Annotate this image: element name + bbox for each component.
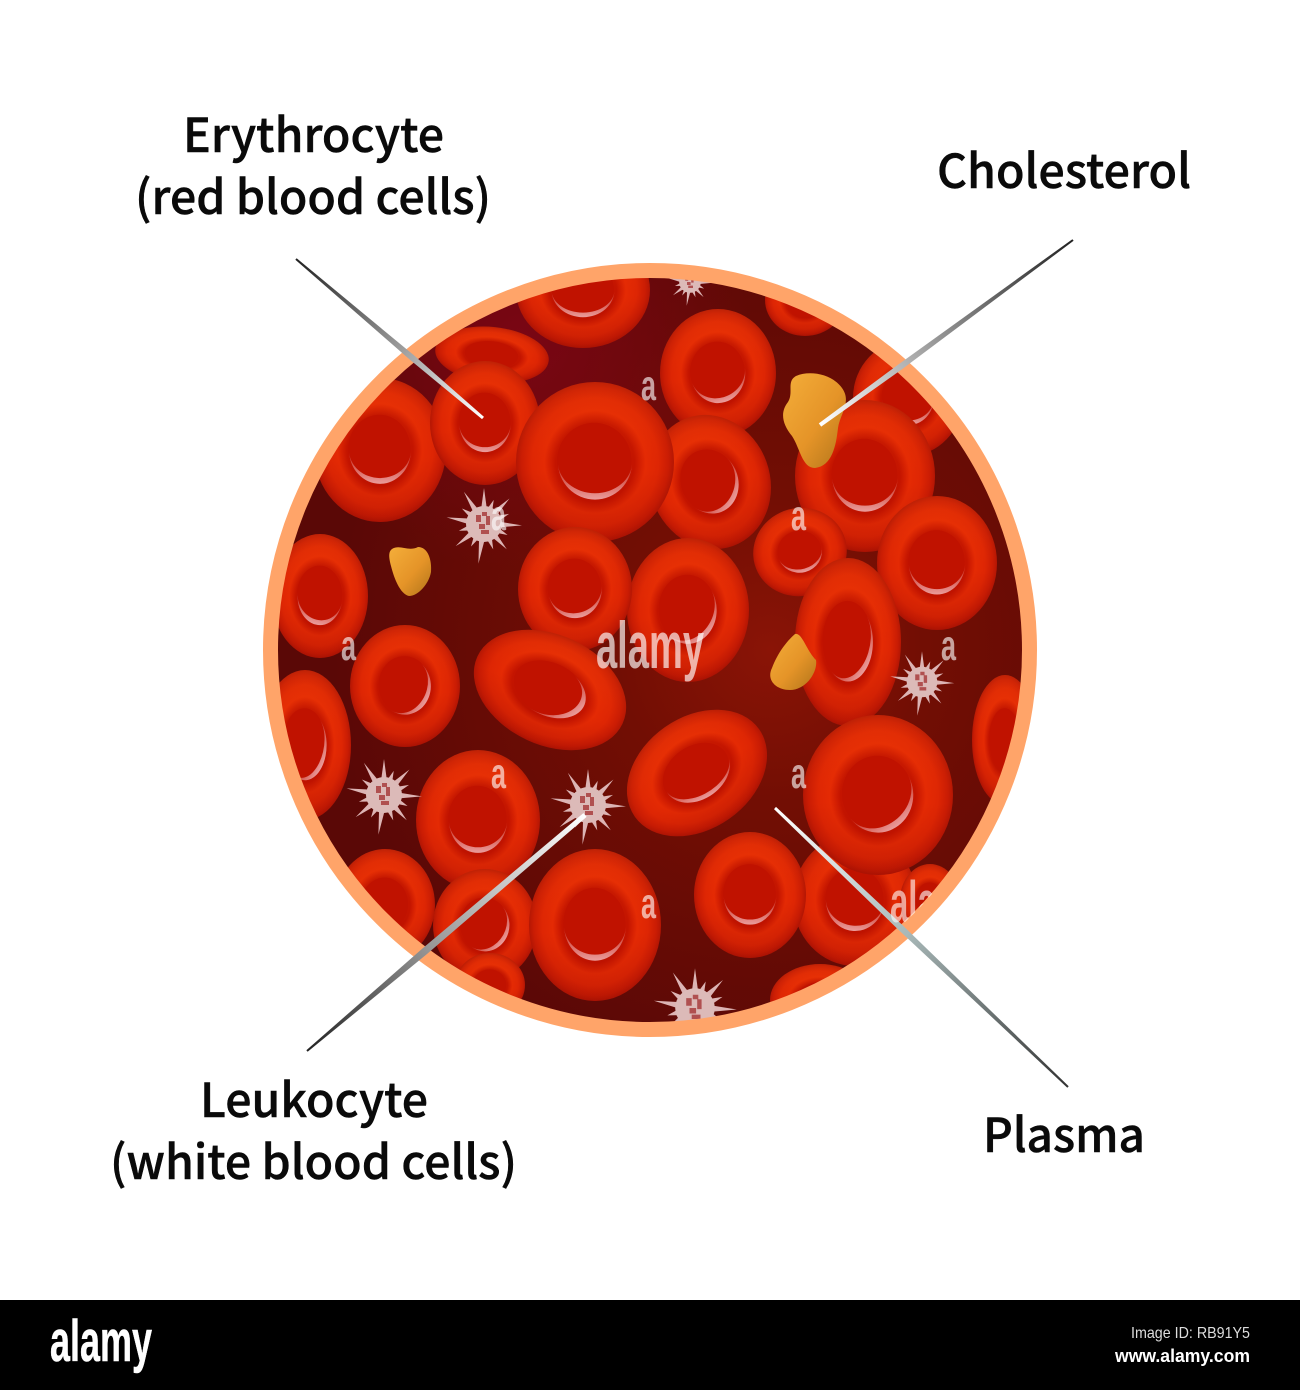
watermark: a bbox=[941, 622, 957, 670]
leader line: plasma bbox=[774, 807, 1069, 1088]
cholesterol deposits bbox=[389, 373, 846, 690]
footer logo: alamy bbox=[50, 1309, 152, 1374]
watermark: a bbox=[641, 362, 657, 410]
label: leukocyte: Leukocyte bbox=[200, 1062, 428, 1131]
orange circle border bbox=[270, 270, 1030, 1030]
microscope circle panel: blood sample bbox=[259, 232, 1038, 1052]
watermark: a bbox=[491, 750, 507, 798]
red blood cells bbox=[259, 232, 1038, 1036]
plasma background bbox=[277, 277, 1023, 1023]
leader line: leukocyte bbox=[306, 813, 587, 1052]
leader line: cholesterol bbox=[819, 239, 1074, 427]
label: erythrocyte: (red blood cells) bbox=[135, 159, 491, 228]
label: plasma: Plasma bbox=[983, 1097, 1145, 1166]
label: erythrocyte bbox=[135, 97, 491, 228]
label: cholesterol: Cholesterol bbox=[937, 133, 1191, 202]
label: erythrocyte: Erythrocyte bbox=[183, 97, 444, 166]
watermark: alam bbox=[890, 870, 965, 935]
leader line: erythrocyte bbox=[295, 258, 484, 419]
watermark: a bbox=[491, 492, 507, 540]
image id: Image ID: RB91Y5 bbox=[1131, 1325, 1250, 1342]
watermark: a bbox=[791, 750, 807, 798]
watermark bbox=[341, 362, 965, 935]
watermark: a bbox=[641, 880, 657, 928]
label: leukocyte bbox=[110, 1062, 517, 1193]
watermark: alamy bbox=[596, 608, 704, 682]
white blood cells bbox=[346, 260, 954, 1052]
footer bar bbox=[0, 1300, 1300, 1390]
label: leukocyte: (white blood cells) bbox=[110, 1124, 517, 1193]
website: www.alamy.com bbox=[1114, 1346, 1250, 1366]
watermark: a bbox=[791, 492, 807, 540]
watermark: a bbox=[341, 622, 357, 670]
